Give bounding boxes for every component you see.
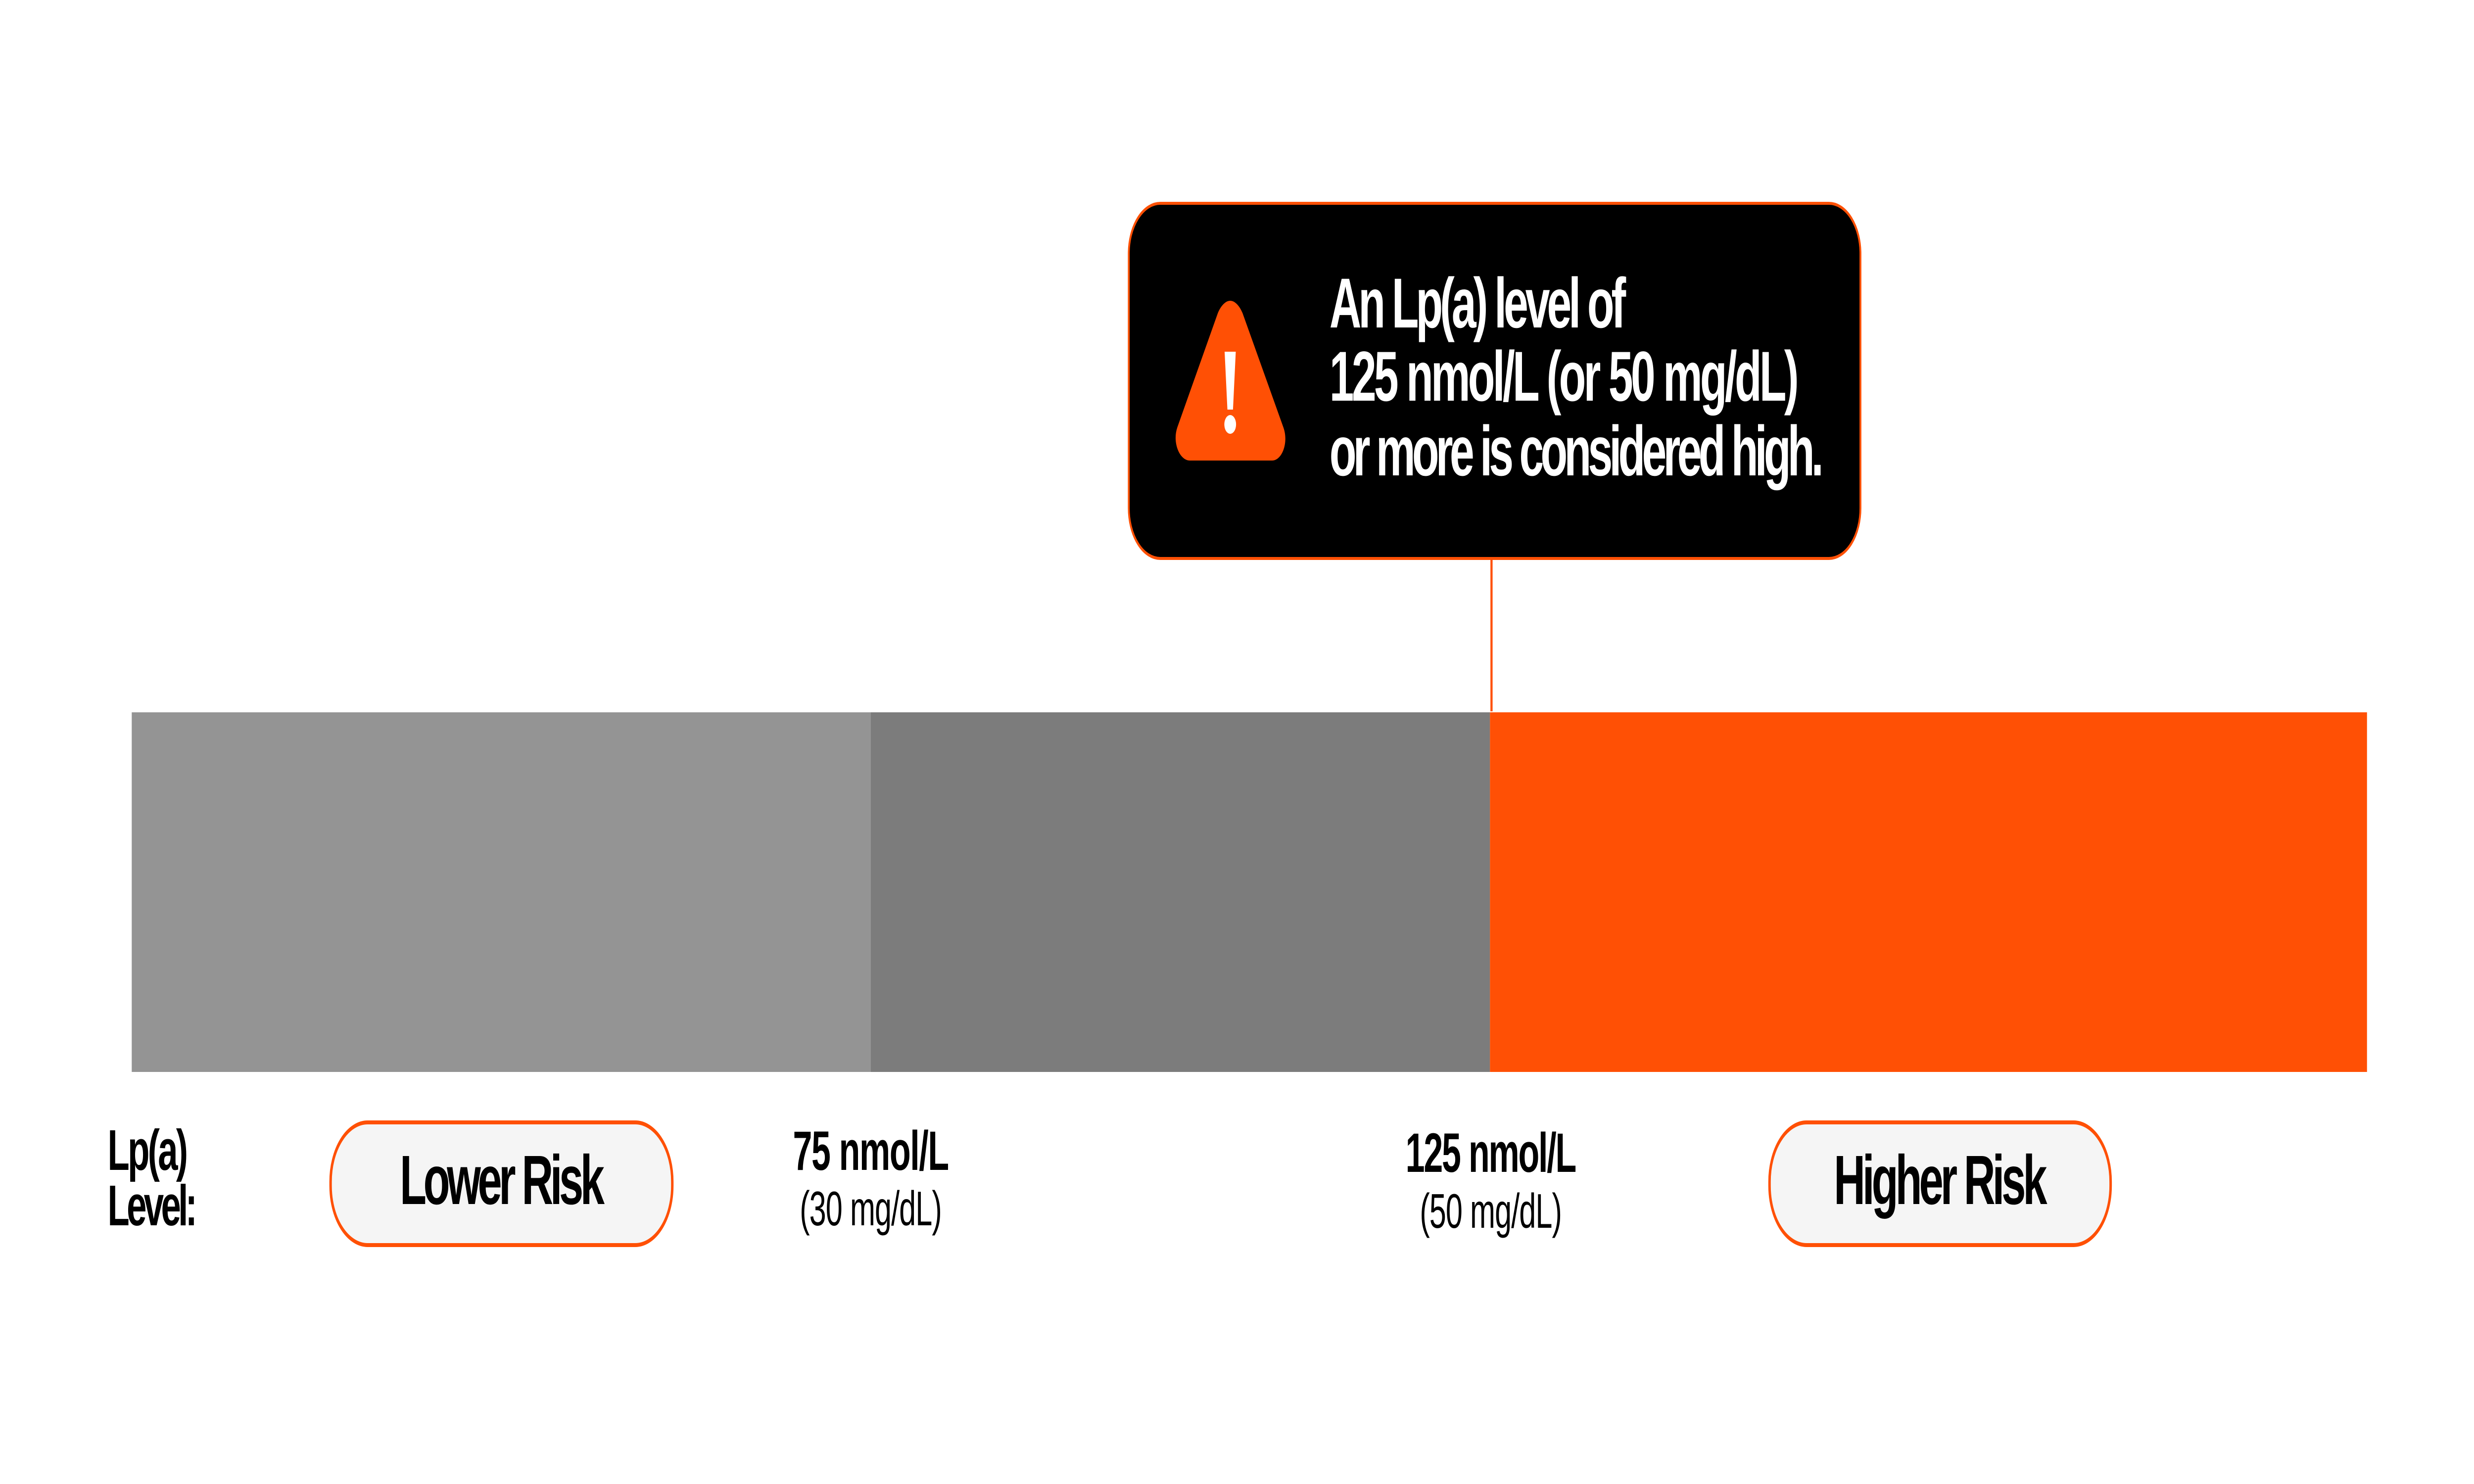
callout text: An Lp(a) level of (1330, 264, 1626, 343)
threshold label: 75 nmol/L: 75 nmol/L (793, 1119, 949, 1182)
threshold label: 125 nmol/L: (50 mg/dL) (1420, 1184, 1562, 1239)
callout: high Lp(a) threshold (1129, 203, 1860, 558)
callout panel (1129, 203, 1860, 558)
icon: warning triangle (1176, 301, 1285, 461)
callout connector line (1490, 558, 1493, 711)
callout text: or more is considered high. (1330, 412, 1824, 491)
callout text: 125 nmol/L (or 50 mg/dL) (1330, 337, 1799, 416)
axis label: Lp(a) Level (108, 1118, 197, 1238)
risk bar (132, 712, 2367, 1072)
bar segment: below 75 nmol/L (132, 712, 871, 1072)
threshold label: 75 nmol/L (793, 1119, 949, 1236)
pill: Lower Risk (331, 1122, 672, 1245)
threshold label: 125 nmol/L: 125 nmol/L (1406, 1121, 1576, 1184)
pill: Lower Risk: Lower Risk (400, 1141, 605, 1219)
pill: Higher Risk: Higher Risk (1834, 1141, 2047, 1219)
threshold label: 125 nmol/L (1406, 1121, 1576, 1239)
bar segment: above 125 nmol/L (1490, 712, 2367, 1072)
axis label: Lp(a) Level: Level: (108, 1174, 197, 1238)
pill: Higher Risk (1769, 1122, 2111, 1245)
callout text (1330, 264, 1824, 491)
threshold label: 75 nmol/L: (30 mg/dL) (800, 1182, 942, 1236)
axis label: Lp(a) Level: Lp(a) (108, 1118, 188, 1182)
bar segment: 75 to 125 nmol/L (871, 712, 1490, 1072)
